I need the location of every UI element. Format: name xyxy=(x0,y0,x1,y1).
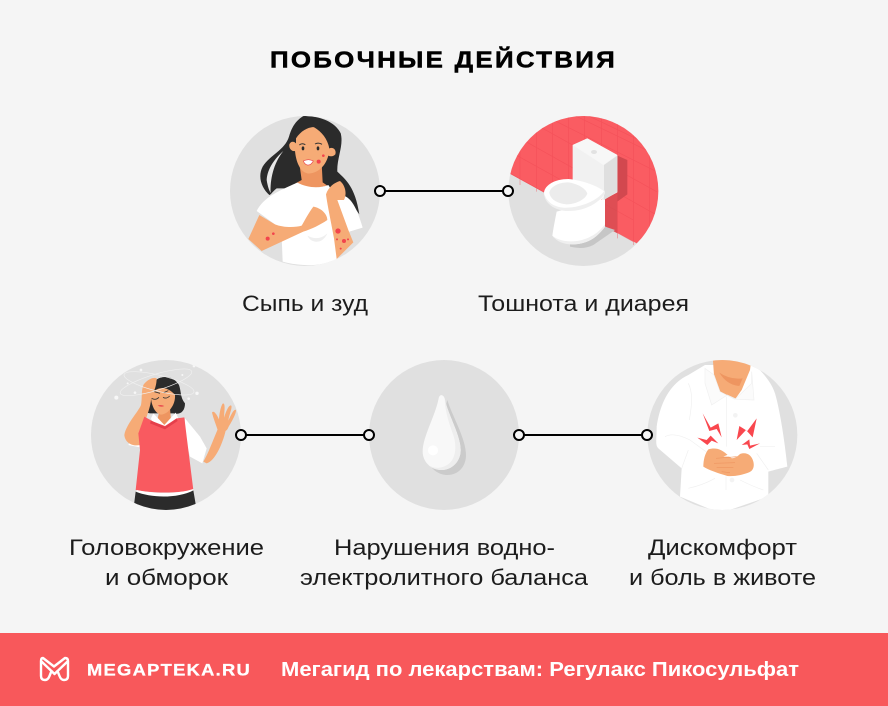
label: stomach pain: Дискомфорт xyxy=(648,535,797,560)
title: ПОБОЧНЫЕ ДЕЙСТВИЯ xyxy=(270,46,617,72)
label: stomach pain: и боль в животе xyxy=(629,565,816,590)
label: water-electrolyte: электролитного баланса xyxy=(300,565,589,590)
label: rash: Сыпь и зуд xyxy=(242,291,368,316)
footer caption: Мегагид по лекарствам: Регулакс Пикосульфат xyxy=(281,659,799,681)
brand name: MEGAPTEKA.RU xyxy=(87,660,251,680)
connector: dizziness to water balance xyxy=(236,430,374,440)
connector: water balance to stomach xyxy=(514,430,652,440)
icon: logo xyxy=(41,658,68,680)
label: dizziness xyxy=(69,535,264,590)
icon: dizzy woman xyxy=(91,360,241,510)
connector: rash to toilet xyxy=(375,186,513,196)
footer band xyxy=(0,633,888,706)
label: water-electrolyte: Нарушения водно- xyxy=(334,535,555,560)
icon: woman with rash xyxy=(230,116,380,266)
icon: toilet xyxy=(508,116,658,266)
label: dizziness: Головокружение xyxy=(69,535,264,560)
label: nausea: Тошнота и диарея xyxy=(478,291,689,316)
label: stomach pain xyxy=(629,535,816,590)
icon: water drop xyxy=(369,360,519,510)
label: dizziness: и обморок xyxy=(105,565,228,590)
icon: man holding stomach xyxy=(647,357,797,513)
label: water-electrolyte xyxy=(300,535,589,590)
